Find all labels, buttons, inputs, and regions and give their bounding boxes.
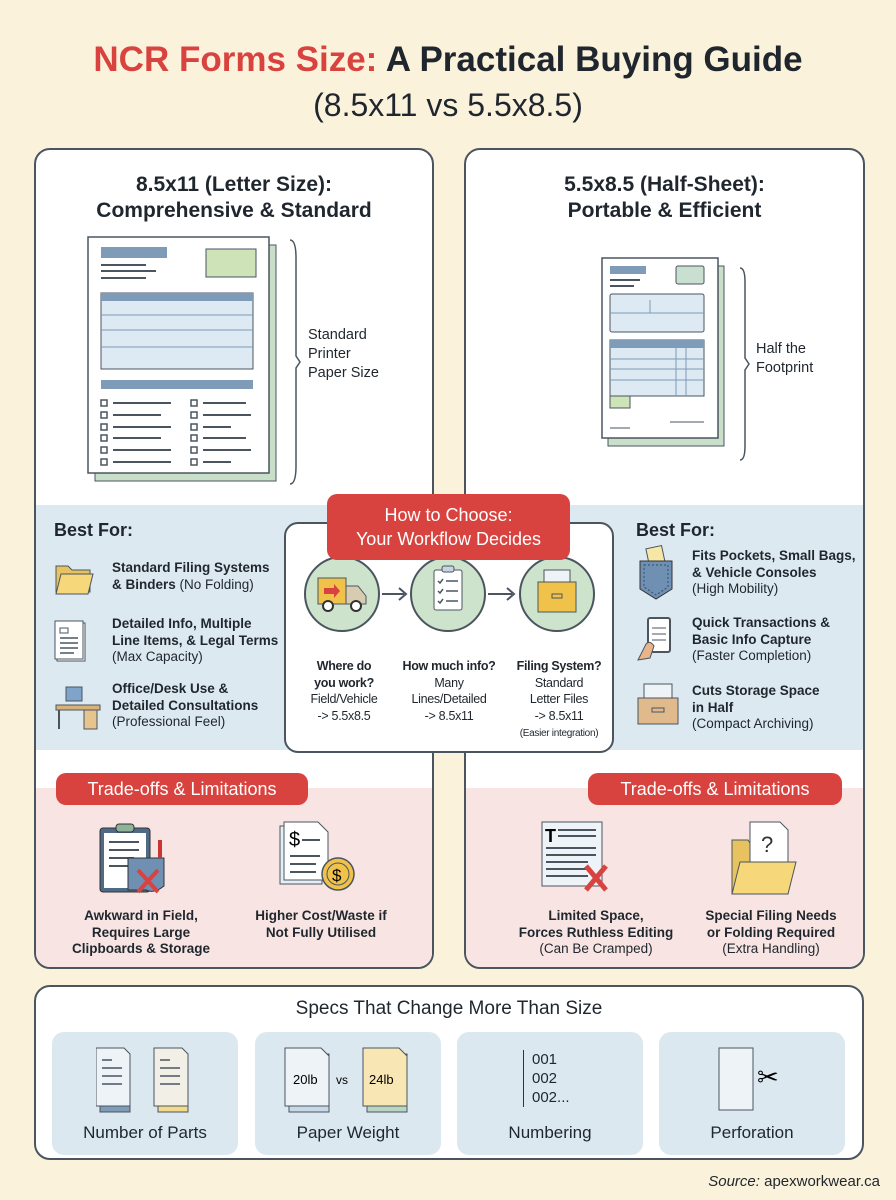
item: office: Detailed Consultations: [112, 698, 258, 712]
label: standard printer paper size: Printer: [308, 346, 351, 362]
item: detailed info: Line Items, & Legal Terms: [112, 632, 278, 648]
item: filing: & Binders (No Folding): [112, 576, 254, 592]
heading: letter size: [96, 173, 372, 222]
heading: half-sheet: Portable & Efficient: [568, 199, 761, 222]
card: perforation: ✂: [757, 1063, 779, 1093]
title: [93, 40, 803, 123]
heading: letter size: Comprehensive & Standard: [96, 199, 372, 222]
caption: special filing: or Folding Required: [707, 924, 835, 940]
caption: limited space: [519, 908, 673, 956]
panel: 5.5x8.5: [464, 148, 865, 969]
card: numbering: 002...: [532, 1089, 570, 1106]
caption: limited space: (Can Be Cramped): [539, 941, 653, 956]
card: paper weight: vs: [336, 1073, 348, 1087]
card: perforation: [659, 1032, 845, 1155]
caption: higher cost: Not Fully Utilised: [266, 924, 376, 940]
caption: awkward: [72, 908, 210, 956]
question: filing: Standard: [535, 676, 583, 690]
heading: half-sheet: [564, 173, 765, 222]
pill: trade-offs left: [56, 773, 308, 805]
heading: letter size: 8.5x11 (Letter Size):: [136, 173, 332, 196]
question: filing: -> 8.5x11: [535, 708, 583, 722]
caption: special filing: Special Filing Needs: [705, 908, 837, 923]
icon: workflow circles: [304, 557, 595, 632]
label: standard printer paper size: Paper Size: [308, 365, 379, 381]
caption: higher cost: [255, 908, 387, 940]
item: pockets: & Vehicle Consoles: [692, 564, 817, 580]
item: quick: Basic Info Capture: [692, 632, 811, 646]
heading: best for left: Best For:: [54, 520, 133, 540]
question: how much: How much info?: [402, 659, 496, 673]
item: storage: [638, 683, 820, 731]
caption: awkward: Awkward in Field,: [84, 908, 198, 923]
question: where: Where do: [317, 659, 371, 673]
icon: cost: $: [289, 829, 300, 851]
caption: awkward: Clipboards & Storage: [72, 941, 210, 956]
heading: best for right: Best For:: [636, 520, 715, 540]
pill: trade-offs left: Trade-offs & Limitations: [87, 779, 277, 799]
card: paper weight: 20lb: [293, 1072, 318, 1087]
item: pockets: (High Mobility): [692, 581, 778, 596]
pill: how to choose: How to Choose:: [384, 505, 513, 525]
item: filing: [55, 560, 270, 594]
icon: folder question: [731, 822, 797, 894]
question: filing: (Easier integration): [520, 728, 598, 739]
item: quick: Quick Transactions &: [692, 615, 830, 630]
icon: cost: [280, 822, 355, 891]
card: numbering: 002: [532, 1070, 557, 1087]
item: office: (Professional Feel): [112, 714, 225, 729]
card: number of parts: Number of Parts: [83, 1123, 207, 1142]
label: half the footprint: [756, 341, 814, 376]
pill: how to choose: Your Workflow Decides: [356, 529, 541, 549]
title: (8.5x11 vs 5.5x8.5): [313, 87, 583, 123]
icon: letter form: [87, 236, 276, 482]
item: filing: Standard Filing Systems: [112, 560, 270, 575]
title: NCR Forms Size: A Practical Buying Guide: [93, 40, 803, 79]
card: paper weight: Paper Weight: [297, 1123, 399, 1142]
item: pockets: [640, 545, 856, 600]
panel: how to choose: [284, 522, 614, 753]
card: paper weight: [255, 1032, 441, 1155]
label: standard printer paper size: Standard: [308, 327, 367, 343]
panel: 8.5x11: [34, 148, 434, 969]
icon: limited space: [542, 822, 608, 892]
item: pockets: Fits Pockets, Small Bags,: [692, 548, 856, 563]
item: storage: in Half: [692, 700, 733, 714]
card: numbering: Numbering: [508, 1123, 592, 1142]
pill: how to choose: [327, 494, 570, 560]
question: filing: Letter Files: [530, 692, 588, 706]
card: numbering: [457, 1032, 643, 1155]
pill: trade-offs right: [588, 773, 842, 805]
card: number of parts: [52, 1032, 238, 1155]
item: storage: (Compact Archiving): [692, 716, 814, 731]
pill: trade-offs right: Trade-offs & Limitations: [620, 779, 810, 799]
label: standard printer paper size: [308, 327, 379, 381]
question: where: you work?: [314, 676, 374, 690]
caption: higher cost: Higher Cost/Waste if: [255, 908, 387, 923]
item: detailed info: (Max Capacity): [112, 649, 203, 664]
question: where: -> 5.5x8.5: [318, 708, 370, 722]
question: how much: Lines/Detailed: [411, 692, 487, 706]
caption: awkward: Requires Large: [92, 924, 190, 940]
heading: half-sheet: 5.5x8.5 (Half-Sheet):: [564, 173, 765, 196]
question: where: [310, 659, 378, 722]
question: filing: Filing System?: [517, 659, 601, 673]
icon: clipboard with x: [100, 824, 164, 894]
source: Source: apexworkwear.ca: [708, 1173, 880, 1190]
icon: cost: $: [332, 866, 342, 885]
panel: specs: [34, 985, 864, 1160]
question: how much: -> 8.5x11: [425, 708, 473, 722]
item: quick: [637, 615, 830, 663]
item: office: Office/Desk Use &: [112, 681, 228, 696]
card: perforation: Perforation: [710, 1123, 794, 1142]
heading: specs: Specs That Change More Than Size: [296, 998, 602, 1019]
item: quick: (Faster Completion): [692, 648, 811, 663]
label: half the footprint: Half the: [756, 341, 806, 357]
caption: limited space: Forces Ruthless Editing: [519, 924, 673, 940]
icon: half form: [601, 257, 724, 446]
item: detailed info: Detailed Info, Multiple: [112, 616, 252, 631]
caption: limited space: Limited Space,: [548, 908, 644, 923]
question: filing: [517, 659, 601, 739]
question: where: Field/Vehicle: [310, 692, 377, 706]
item: storage: Cuts Storage Space: [692, 683, 820, 698]
caption: special filing: (Extra Handling): [722, 941, 820, 956]
icon: limited space: T: [545, 826, 556, 846]
icon: folder question: ?: [761, 832, 773, 857]
label: half the footprint: Footprint: [756, 360, 813, 376]
item: office: [56, 681, 258, 730]
card: numbering: 001: [532, 1051, 557, 1068]
item: detailed info: [54, 616, 278, 664]
question: how much: [402, 659, 496, 722]
question: how much: Many: [434, 676, 464, 690]
caption: special filing: [705, 908, 837, 956]
card: paper weight: 24lb: [369, 1072, 394, 1087]
